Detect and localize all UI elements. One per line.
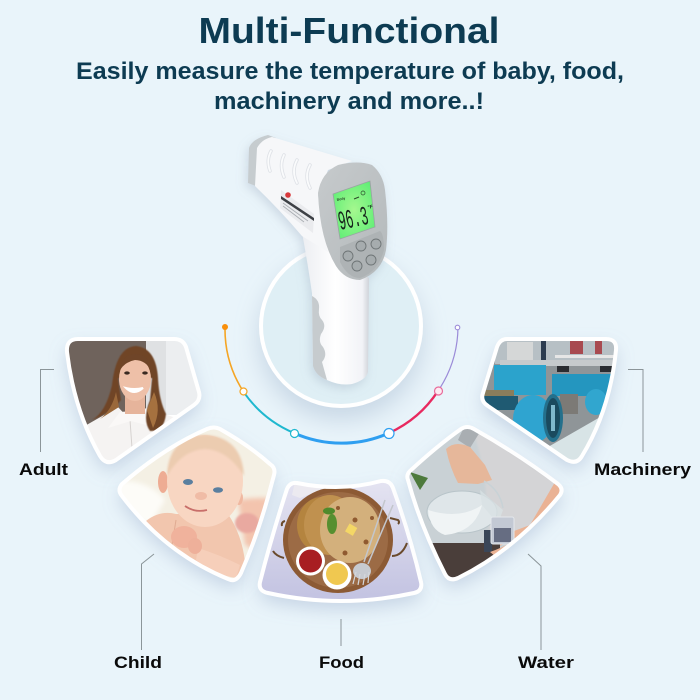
control buttons (343, 239, 381, 271)
curved gradient arc with nodes (222, 324, 460, 443)
label: water: Water (518, 653, 574, 672)
LCD screen: Body (336, 196, 346, 202)
thermometer barrel (255, 137, 352, 252)
leader line: water (528, 554, 541, 650)
photo card: machinery (478, 335, 625, 470)
label: food: Food (319, 653, 364, 672)
leader line: child (142, 554, 154, 650)
label: child: Child (114, 653, 162, 672)
photo card: adult (60, 335, 206, 470)
LCD screen (333, 181, 375, 239)
thermometer head (318, 162, 387, 280)
button panel (340, 231, 384, 278)
photo card: child (110, 420, 280, 590)
label: machinery: Machinery (594, 460, 692, 479)
subtitle: Easily measure the temperature of baby, food, (76, 58, 624, 85)
subtitle: machinery and more..! (214, 88, 484, 115)
photo card: water (400, 420, 570, 590)
leader line: food (340, 619, 342, 646)
thermometer grip (312, 296, 327, 380)
title: Multi-Functional (198, 10, 500, 51)
subtitle (76, 58, 624, 115)
central circle (261, 246, 421, 406)
thermometer rear cap (248, 135, 276, 186)
thermometer (248, 135, 387, 384)
LCD screen: 96.3 (336, 203, 371, 239)
label: adult: Adult (19, 460, 68, 479)
thermometer handle (302, 232, 369, 384)
LCD screen: °F (367, 204, 373, 211)
barrel ribs (268, 151, 310, 188)
leader line: adult (40, 370, 54, 452)
photo card: food (250, 475, 430, 610)
product sticker (280, 190, 314, 233)
leader line: machinery (628, 370, 643, 452)
